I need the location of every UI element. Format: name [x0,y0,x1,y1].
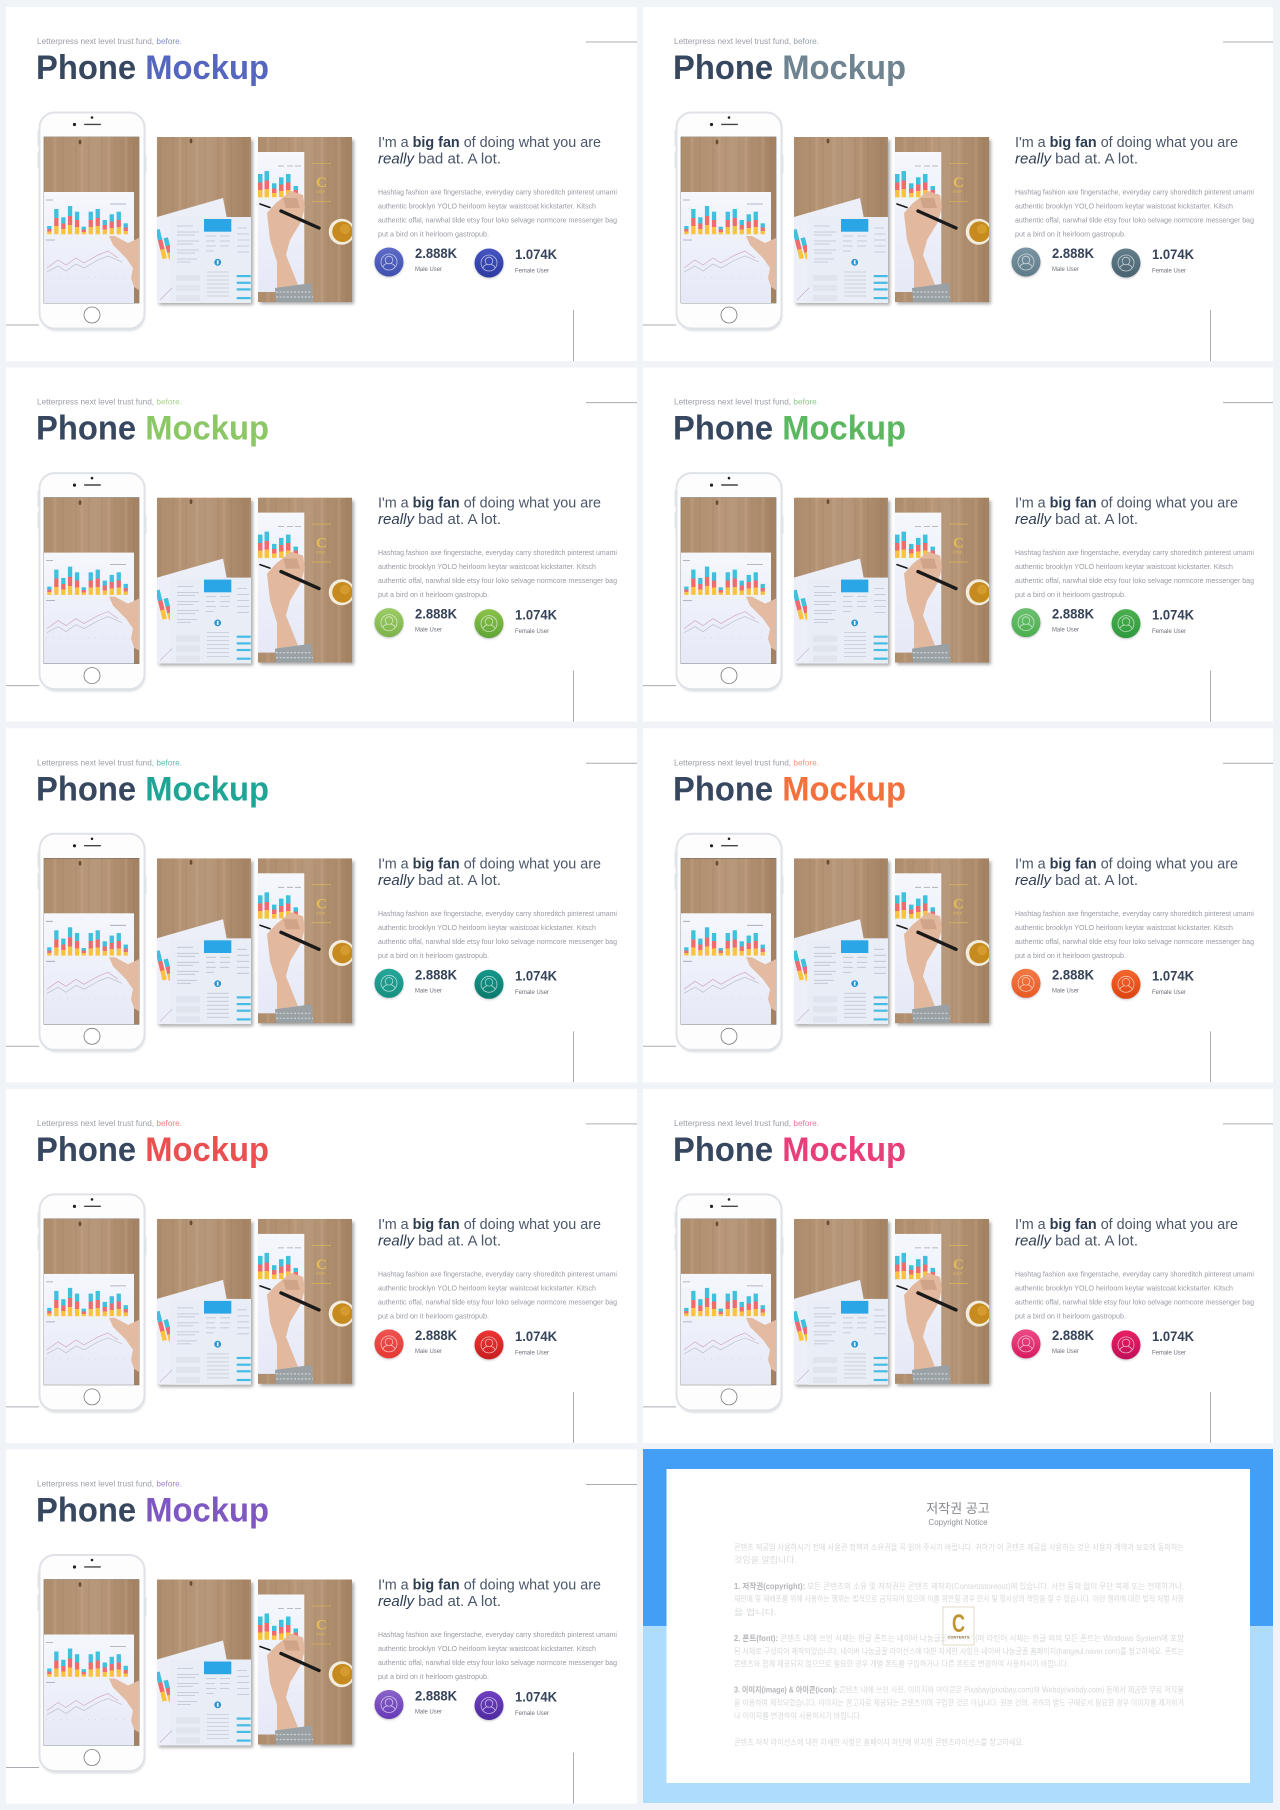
heading: I'm a big fan of doing what you are [378,496,601,512]
phone mockup [674,473,784,692]
body text: put a bird on it heirloom gastropub. [1015,1311,1126,1320]
body text: Hashtag fashion axe fingerstache, everyday carry shoreditch pinterest umami [1015,1269,1254,1278]
notice body text [734,1542,1185,1747]
stat: male user: 2.888K [415,245,457,261]
stat: male user: Male User [1052,267,1079,273]
heading: really bad at. A lot. [1015,1233,1138,1249]
stat: female user: 1.074K [1152,967,1194,983]
notice body text: 콘텐츠 저작 라이선스에 대한 자세한 사항은 홈페이지 하단에 위치한 콘텐츠라이선스를 참고하세요. [734,1737,1024,1747]
heading: really bad at. A lot. [1015,873,1138,889]
photo: hand writing: STEP [316,1632,326,1636]
heading [378,856,601,889]
stat: male user: Male User [415,988,442,994]
title: Phone Mockup [36,1131,269,1169]
photo: hand writing: C [953,896,964,912]
body text: put a bird on it heirloom gastropub. [378,590,489,599]
heading [1015,1217,1238,1249]
stat: female user [1112,1328,1194,1359]
panel: slide 9 purple [6,1450,637,1804]
stat: male user [374,966,457,998]
stat: male user [374,606,457,637]
photo: hand writing: C [316,1618,327,1634]
stat: female user: 1.074K [515,967,557,983]
stat: male user: 2.888K [415,966,457,982]
stat: male user: Male User [1052,1349,1079,1355]
body text: authentic offal, narwhal tilde etsy four loko selvage normcore messenger bag [1015,937,1254,946]
photo: report on desk [792,137,890,305]
body text: authentic offal, narwhal tilde etsy four loko selvage normcore messenger bag [378,576,617,585]
stat: female user: 1.074K [515,1688,557,1704]
body text: put a bird on it heirloom gastropub. [378,951,489,960]
notice body text: 콘텐츠와 함께 제공되지 않으므로 필요한 경우 개별 폰트를 구입하거나 다른 폰트로 변경하여 사용하시기 바랍니다. [734,1658,1069,1668]
heading: I'm a big fan of doing what you are [1015,856,1238,872]
panel: slide 5 teal [6,728,637,1082]
stat: female user: 1.074K [515,1328,557,1344]
body text: Hashtag fashion axe fingerstache, everyday carry shoreditch pinterest umami [378,548,617,557]
stat: male user: Male User [415,1710,442,1716]
stat: female user: 1.074K [515,246,557,262]
stat: female user: Female User [1152,268,1186,274]
body text: authentic brooklyn YOLO heirloom keytar waistcoat kickstarter. Kitsch [378,202,596,210]
notice body text: 1. 저작권(copyright): 모든 콘텐츠의 소유 및 저작권은 콘텐츠 제작자(Contentstoreout)에 있습니다. 사전 동의 없이 무단 복제 또는 전재하거나, [734,1581,1184,1591]
body text: Hashtag fashion axe fingerstache, everyday carry shoreditch pinterest umami [378,909,617,918]
stat: male user [374,245,457,276]
heading: I'm a big fan of doing what you are [1015,496,1238,512]
title: Phone Mockup [673,1131,906,1169]
notice body text: 된 서체로 구성되어 제작되었습니다. 네이버 나눔글꼴 라이선스에 대한 자세한 사항은 네이버 나눔글꼴 홈페이지(hangeul.naver.com)를 참고하세요. 폰트는 [734,1646,1184,1656]
stat: female user: Female User [1152,1350,1186,1356]
stat: female user: Female User [1152,990,1186,996]
body text: Hashtag fashion axe fingerstache, everyday carry shoreditch pinterest umami [378,188,617,196]
eyebrow text: Letterpress next level trust fund, before. [674,758,819,767]
heading: really bad at. A lot. [378,152,501,168]
heading [378,1217,601,1249]
notice body text: 재판매 및 재배포를 위해 사용하는 행위는 법적으로 금지되어 있으며 이를 위반할 경우 민사 및 형사상의 책임을 질 수 있습니다. 이런 행위에 대한 법적 처벌 사항 [734,1594,1185,1604]
heading: really bad at. A lot. [378,1233,501,1249]
stat: female user: Female User [515,268,549,274]
title: Phone Mockup [673,770,906,808]
eyebrow text: Letterpress next level trust fund, before. [674,37,819,46]
photo: report on desk [155,1219,253,1387]
stat: male user [1012,1327,1094,1358]
stat: male user: 2.888K [1052,1327,1094,1343]
heading: really bad at. A lot. [378,512,501,528]
photo: hand writing: STEP [316,911,326,915]
stat: female user: 1.074K [1152,246,1194,262]
heading [1015,856,1238,889]
stat: female user: Female User [1152,629,1186,635]
notice body text: 2. 폰트(font): 콘텐츠 내에 쓰인 서체는 한글 폰트는 네이버 나눔글꼴의 서체이며 라틴어 서체는 한글 외의 모든 폰트는 Windows System에 포함 [734,1633,1185,1643]
photo: report on desk [792,858,890,1026]
stat: male user: 2.888K [415,1327,457,1343]
stat: male user: Male User [1052,988,1079,994]
notice title: 저작권 공고 [926,1501,990,1516]
notice body text: 나 이미지를 변경하여 사용하시기 바랍니다. [734,1710,862,1720]
photo: report on desk [792,1219,890,1387]
body text: authentic offal, narwhal tilde etsy four loko selvage normcore messenger bag [378,216,617,224]
panel: slide 2 slate [643,7,1273,361]
panel: slide 1 indigo [6,7,637,361]
photo: report on desk [792,498,890,666]
stat: female user: Female User [515,990,549,996]
photo: hand writing [895,137,992,304]
body text: authentic brooklyn YOLO heirloom keytar waistcoat kickstarter. Kitsch [378,923,596,932]
stat: male user [1012,606,1094,637]
title: Phone Mockup [673,49,906,87]
panel: slide 3 light green [6,368,637,722]
stat: male user: Male User [1052,628,1079,634]
body text: authentic brooklyn YOLO heirloom keytar waistcoat kickstarter. Kitsch [1015,923,1233,932]
stat: male user [1012,966,1094,998]
body text: authentic brooklyn YOLO heirloom keytar waistcoat kickstarter. Kitsch [378,1644,596,1653]
phone mockup [38,473,146,692]
stat: male user: 2.888K [415,1688,457,1704]
panel: slide 4 green [643,368,1273,722]
title: Phone Mockup [36,1492,269,1530]
photo: report on desk [155,1580,253,1748]
photo: hand writing [895,498,992,665]
heading: I'm a big fan of doing what you are [378,1217,601,1233]
body text [1015,1269,1254,1320]
photo: hand writing [895,1219,992,1386]
photo: hand writing: C [953,175,964,191]
stat: female user [1112,607,1194,638]
heading: really bad at. A lot. [378,873,501,889]
title: Phone Mockup [673,410,906,448]
heading [1015,135,1238,168]
photo: hand writing [258,1219,355,1386]
body text [378,1269,617,1320]
eyebrow text: Letterpress next level trust fund, before. [37,398,182,407]
stat: female user: 1.074K [1152,1328,1194,1344]
logo stamp: CONTENTS [948,1634,970,1640]
stat: female user [474,1688,557,1720]
body text: Hashtag fashion axe fingerstache, everyday carry shoreditch pinterest umami [378,1269,617,1278]
heading: really bad at. A lot. [1015,512,1138,528]
stat: female user: 1.074K [1152,607,1194,623]
title: Phone Mockup [36,49,269,87]
body text: Hashtag fashion axe fingerstache, everyday carry shoreditch pinterest umami [1015,548,1254,557]
stat: male user: 2.888K [1052,966,1094,982]
heading [1015,496,1238,528]
heading: I'm a big fan of doing what you are [1015,1217,1238,1233]
photo: hand writing: C [953,536,964,552]
photo: hand writing: C [316,536,327,552]
phone mockup [38,1194,146,1413]
photo: hand writing: STEP [316,190,326,194]
body text: Hashtag fashion axe fingerstache, everyday carry shoreditch pinterest umami [378,1630,617,1639]
body text [378,1630,617,1681]
photo: hand writing [895,858,992,1025]
eyebrow text: Letterpress next level trust fund, before. [674,1119,819,1128]
photo: report on desk [155,137,253,305]
heading [378,1578,601,1610]
stat: female user [474,246,557,278]
stat: female user: Female User [515,1711,549,1717]
body text [378,548,617,599]
heading: I'm a big fan of doing what you are [378,135,601,151]
photo: hand writing [258,498,355,665]
body text: authentic offal, narwhal tilde etsy four loko selvage normcore messenger bag [1015,216,1254,224]
phone mockup [674,112,784,331]
phone mockup [38,1555,146,1774]
photo: hand writing [258,137,355,304]
stat: female user [1112,967,1194,999]
stat: female user [1112,246,1194,278]
body text [1015,548,1254,599]
title: Phone Mockup [36,410,269,448]
panel: slide 8 pink [643,1089,1273,1443]
photo: hand writing: C [316,175,327,191]
stat: male user: 2.888K [415,606,457,622]
notice subtitle: Copyright Notice [928,1518,988,1527]
stat: male user: Male User [415,1349,442,1355]
photo: hand writing: STEP [953,190,963,194]
stat: male user: 2.888K [1052,245,1094,261]
heading [378,135,601,168]
body text: authentic offal, narwhal tilde etsy four loko selvage normcore messenger bag [1015,576,1254,585]
stat: male user [374,1327,457,1358]
stat: female user [474,607,557,638]
heading [378,496,601,528]
notice body text: 을 이용하여 제작되었습니다. 이미지는 참고자료 제공되는 콘텐츠이며 구입한 것은 아닙니다. 원본 건의, 귀하의 별도 구매로서 필요한 경우 이미지를 제거하거 [734,1698,1184,1708]
body text: authentic brooklyn YOLO heirloom keytar waistcoat kickstarter. Kitsch [1015,1283,1233,1292]
notice body text: 콘텐츠 제공업 사용하시기 전에 사용권 정책과 소유권을 꼭 읽어 주시기 바랍니다. 귀하가 이 콘텐츠 제공을 사용하는 것은 사용자 계약과 보호에 동의하는 [734,1542,1184,1552]
panel: slide 6 orange [643,728,1273,1082]
panel: slide 7 red [6,1089,637,1443]
phone mockup [674,1194,784,1413]
body text: Hashtag fashion axe fingerstache, everyday carry shoreditch pinterest umami [1015,909,1254,918]
phone mockup [38,834,146,1052]
eyebrow text: Letterpress next level trust fund, before. [674,398,819,407]
body text: put a bird on it heirloom gastropub. [378,1672,489,1681]
photo: hand writing [258,858,355,1025]
body text: Hashtag fashion axe fingerstache, everyday carry shoreditch pinterest umami [1015,188,1254,196]
photo: hand writing: C [953,1257,964,1273]
stat: male user: Male User [415,628,442,634]
heading: really bad at. A lot. [1015,152,1138,168]
body text [378,909,617,960]
photo: hand writing: C [316,1257,327,1273]
body text: authentic offal, narwhal tilde etsy four loko selvage normcore messenger bag [378,937,617,946]
heading: really bad at. A lot. [378,1594,501,1610]
logo stamp: C [952,1610,965,1638]
phone mockup [38,112,146,331]
body text [1015,909,1254,960]
eyebrow text: Letterpress next level trust fund, before. [37,758,182,767]
body text: authentic brooklyn YOLO heirloom keytar waistcoat kickstarter. Kitsch [1015,562,1233,571]
stat: male user: Male User [415,267,442,273]
photo: hand writing: STEP [316,551,326,555]
body text: authentic offal, narwhal tilde etsy four loko selvage normcore messenger bag [378,1297,617,1306]
photo: report on desk [155,498,253,666]
photo: hand writing: C [316,896,327,912]
heading: I'm a big fan of doing what you are [378,856,601,872]
photo: report on desk [155,858,253,1026]
stat: female user: Female User [515,629,549,635]
heading: I'm a big fan of doing what you are [378,1578,601,1594]
notice body text: 을 합니다. [734,1607,777,1617]
stat: male user [1012,245,1094,276]
body text: put a bird on it heirloom gastropub. [1015,590,1126,599]
photo: hand writing: STEP [953,551,963,555]
body text: put a bird on it heirloom gastropub. [378,1311,489,1320]
eyebrow text: Letterpress next level trust fund, before. [37,1119,182,1128]
body text: put a bird on it heirloom gastropub. [1015,951,1126,960]
body text: authentic brooklyn YOLO heirloom keytar waistcoat kickstarter. Kitsch [378,562,596,571]
body text [378,188,617,238]
heading: I'm a big fan of doing what you are [1015,135,1238,151]
eyebrow text: Letterpress next level trust fund, before. [37,1480,182,1488]
photo: hand writing: STEP [316,1272,326,1276]
body text [1015,188,1254,238]
body text: put a bird on it heirloom gastropub. [1015,230,1126,238]
photo: hand writing: STEP [953,911,963,915]
notice body text: 3. 이미지(image) & 아이콘(icon): 콘텐츠 내에 쓰인 사진, 이미지와 아이콘은 Pixabay(pixabay.com)와 Webdy(webdy.com) 등에서 제공한 무료 저작물 [734,1684,1184,1694]
body text: authentic brooklyn YOLO heirloom keytar waistcoat kickstarter. Kitsch [378,1283,596,1292]
panel: copyright notice [643,1449,1273,1803]
body text: authentic offal, narwhal tilde etsy four loko selvage normcore messenger bag [378,1658,617,1667]
stat: male user: 2.888K [1052,606,1094,622]
eyebrow text: Letterpress next level trust fund, before. [37,37,182,46]
body text: authentic offal, narwhal tilde etsy four loko selvage normcore messenger bag [1015,1297,1254,1306]
stat: female user [474,1328,557,1359]
body text: authentic brooklyn YOLO heirloom keytar waistcoat kickstarter. Kitsch [1015,202,1233,210]
photo: hand writing [258,1580,355,1746]
stat: female user: Female User [515,1350,549,1356]
title: Phone Mockup [36,770,269,808]
logo stamp [943,1607,974,1645]
notice body text: 것임을 알립니다. [734,1554,797,1564]
stat: male user [374,1688,457,1719]
stat: female user [474,967,557,999]
stat: female user: 1.074K [515,607,557,623]
photo: hand writing: STEP [953,1272,963,1276]
body text: put a bird on it heirloom gastropub. [378,230,489,238]
phone mockup [674,834,784,1052]
